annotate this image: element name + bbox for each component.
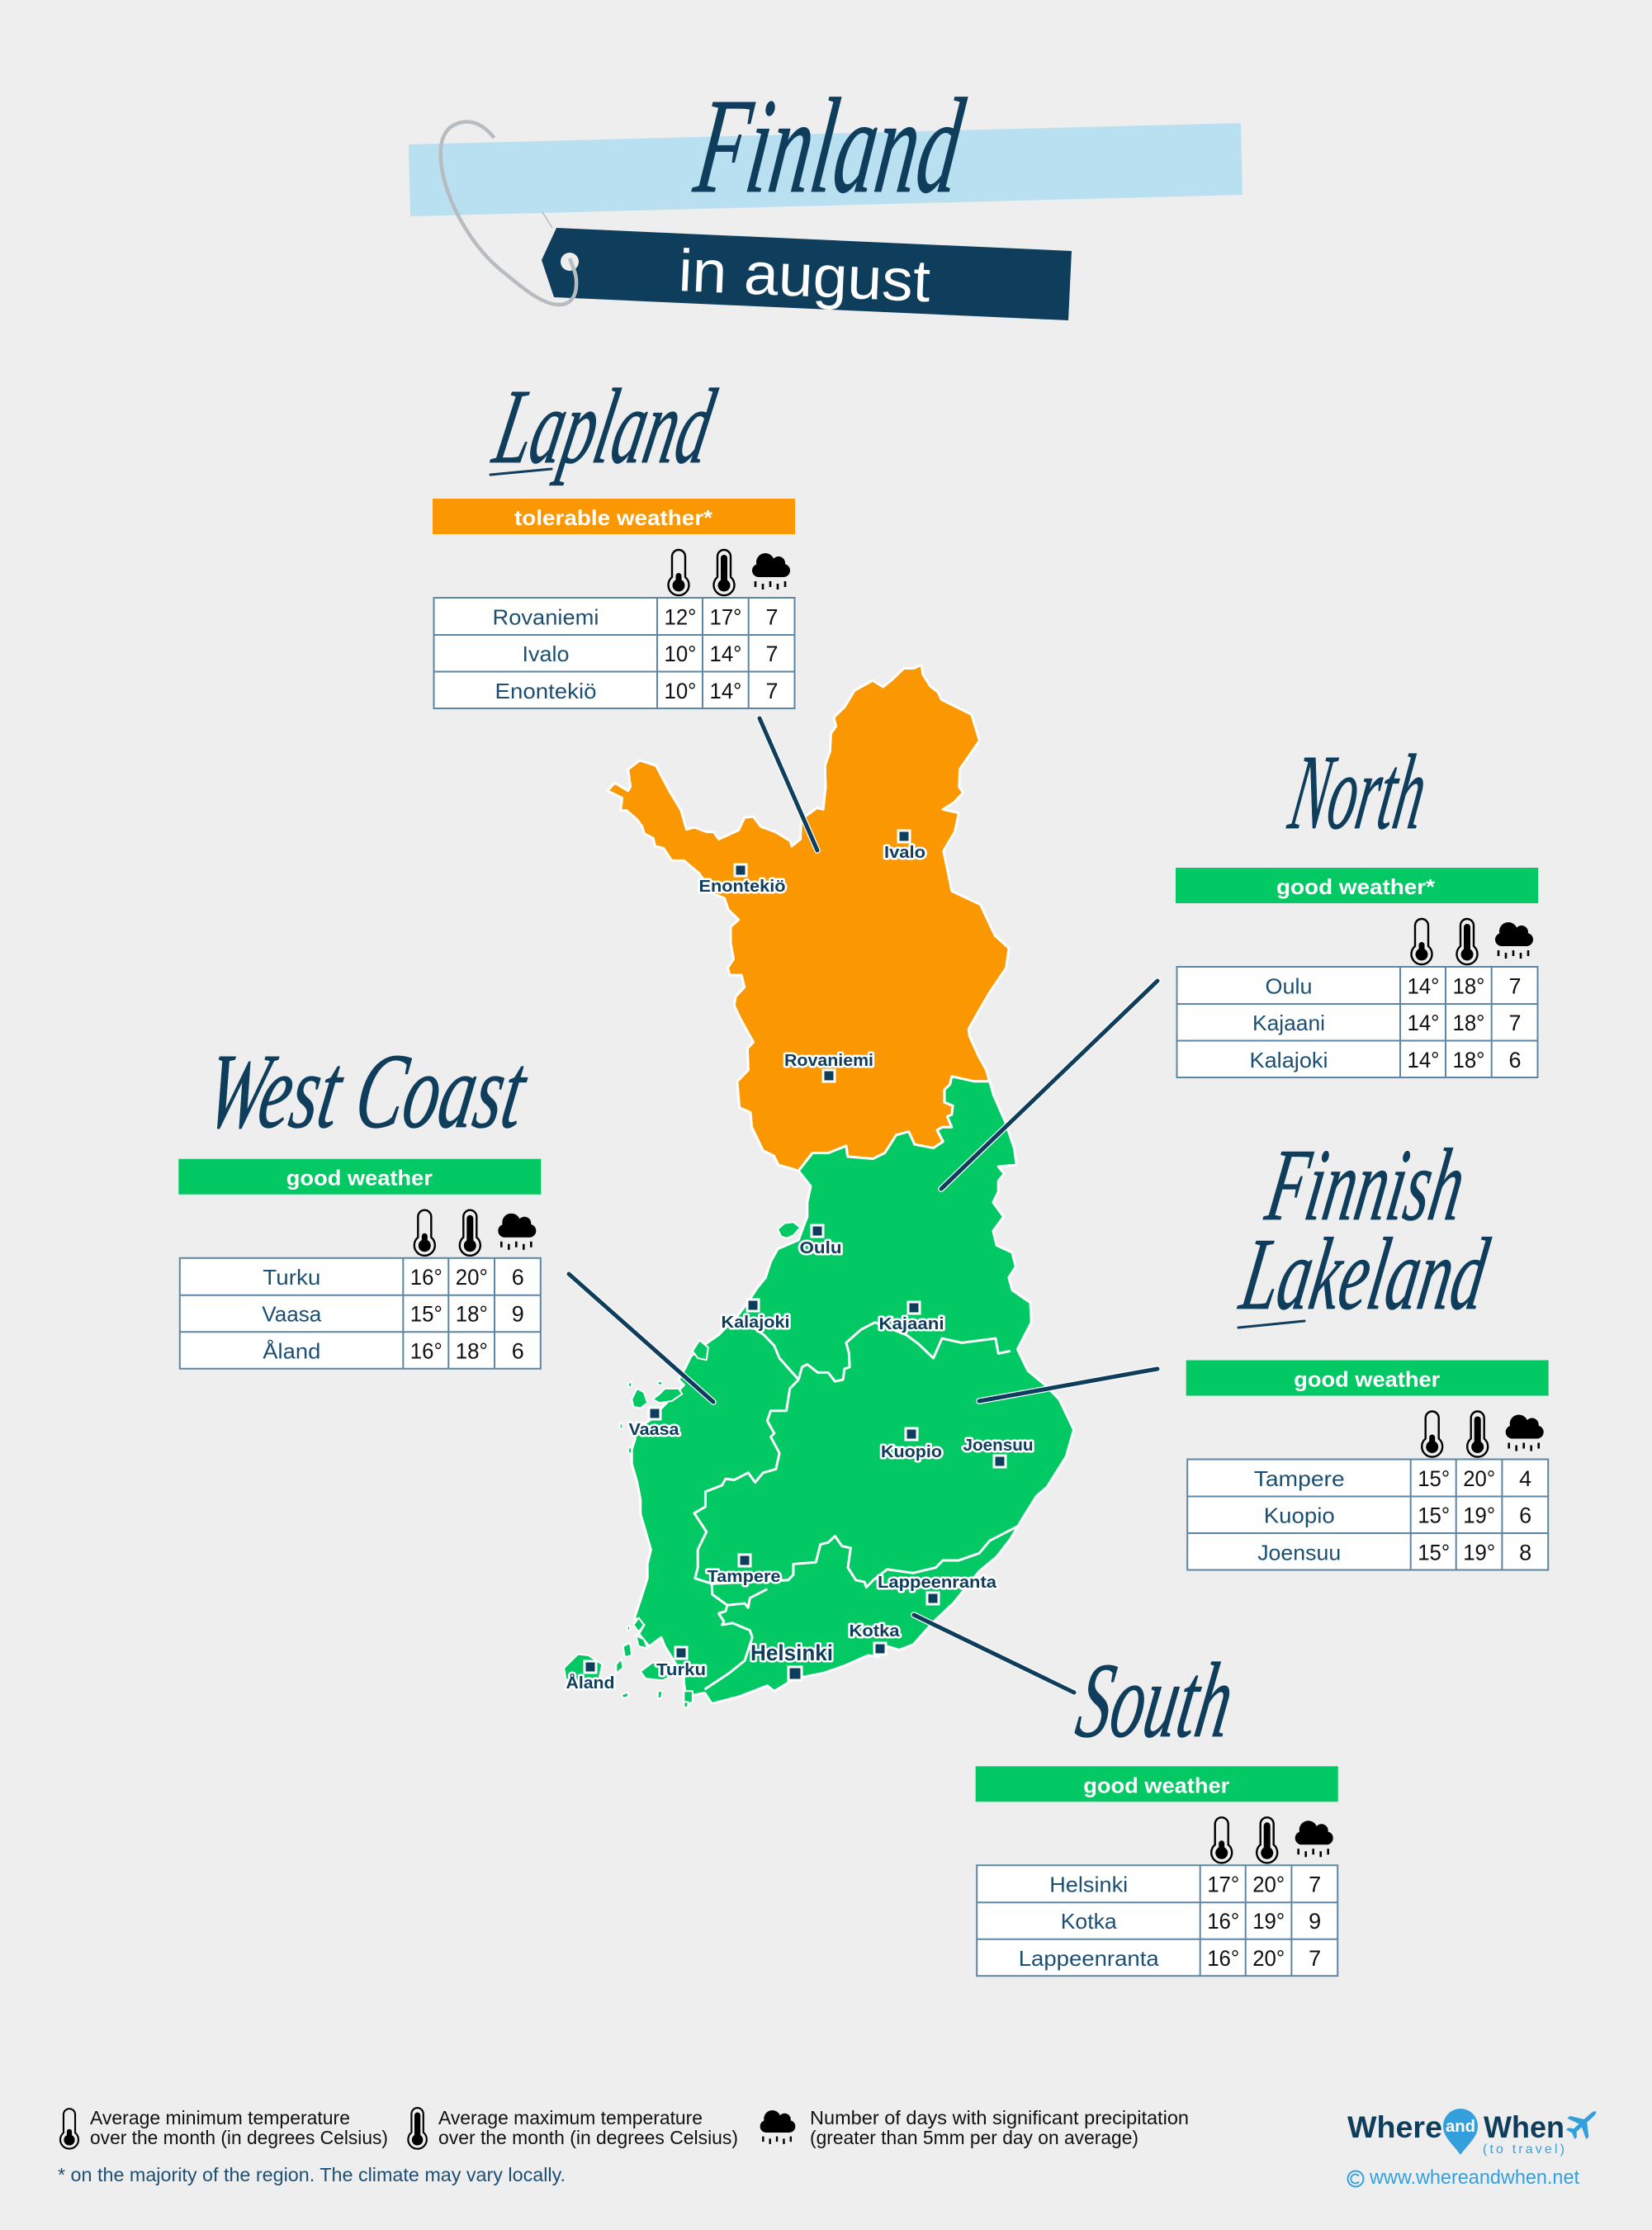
climate table: 9 xyxy=(512,1302,524,1327)
city: Kajaani: Kajaani xyxy=(878,1315,944,1333)
climate table: 6 xyxy=(512,1339,524,1364)
climate table: 9 xyxy=(1309,1909,1321,1934)
climate table: 7 xyxy=(765,642,779,666)
city: Joensuu: Joensuu xyxy=(963,1437,1034,1455)
city: Kalajoki xyxy=(722,1300,789,1332)
climate table: 20° xyxy=(456,1265,488,1290)
islands xyxy=(564,1222,800,1707)
city: Oulu xyxy=(799,1225,842,1257)
region: Lapland xyxy=(608,665,1009,1171)
climate table: 15° xyxy=(1418,1503,1450,1527)
wordmark: Where: Where xyxy=(1347,2110,1442,2144)
city: Rovaniemi: Rovaniemi xyxy=(784,1052,873,1070)
climate table: 10° xyxy=(664,642,697,666)
city: Tampere xyxy=(707,1555,781,1586)
icon: map pin: and xyxy=(1446,2118,1475,2136)
climate table: 12° xyxy=(664,604,697,629)
climate table: 15° xyxy=(1418,1466,1450,1491)
climate table: 18° xyxy=(456,1302,488,1327)
city: Åland xyxy=(566,1661,614,1693)
climate table: Åland xyxy=(263,1339,320,1364)
climate table xyxy=(977,1865,1337,1976)
legend item: precipitation days: (greater than 5mm per day on average) xyxy=(810,2127,1138,2148)
weather rating bar: good weather* xyxy=(1276,874,1436,899)
city: Enontekiö xyxy=(698,864,786,896)
weather rating bar xyxy=(178,1159,541,1195)
panel: North xyxy=(1176,733,1538,1077)
icon: plane xyxy=(1561,2101,1606,2145)
city: Ivalo: Ivalo xyxy=(884,844,925,862)
climate table: Rovaniemi xyxy=(492,604,599,629)
climate table: 20° xyxy=(1463,1466,1495,1491)
city: Lappeenranta xyxy=(878,1574,997,1604)
climate table: 17° xyxy=(710,604,741,629)
climate table: 7 xyxy=(765,604,779,629)
climate table: Enontekiö xyxy=(495,679,596,703)
weather rating bar xyxy=(1176,868,1538,903)
copyright and website: www.whereandwhen.net xyxy=(1369,2166,1579,2189)
climate table: Kotka xyxy=(1061,1909,1117,1934)
heading: Finland: Finland xyxy=(687,70,972,221)
panel: Lapland xyxy=(433,367,795,708)
climate table xyxy=(434,598,794,708)
climate table xyxy=(1177,967,1537,1077)
weather rating bar: tolerable weather* xyxy=(514,505,713,530)
climate table: 8 xyxy=(1519,1541,1531,1565)
panel: South xyxy=(976,1641,1338,1976)
legend item: maximum temperature xyxy=(408,2107,738,2149)
city: Enontekiö: Enontekiö xyxy=(698,878,786,896)
heading: North: North xyxy=(1281,733,1435,852)
luggage tag xyxy=(542,228,1072,320)
legend item: minimum temperature: over the month (in degrees Celsius) xyxy=(90,2127,388,2148)
city: Turku: Turku xyxy=(656,1661,706,1679)
city: Kajaani xyxy=(878,1302,944,1333)
climate table: 18° xyxy=(1453,1011,1484,1035)
city: Ivalo xyxy=(884,831,925,862)
climate table: 7 xyxy=(765,679,779,703)
climate table: 16° xyxy=(1207,1946,1239,1971)
weather rating bar: good weather xyxy=(1294,1367,1440,1392)
climate table: 19° xyxy=(1463,1503,1495,1527)
city: Kalajoki: Kalajoki xyxy=(722,1314,789,1332)
logo: Where and When xyxy=(1347,2101,1606,2189)
climate table: 4 xyxy=(1519,1466,1531,1491)
climate table: 7 xyxy=(1309,1946,1321,1971)
weather rating bar: good weather xyxy=(1083,1773,1229,1797)
climate table: 19° xyxy=(1463,1541,1495,1565)
region borders xyxy=(694,1323,1017,1689)
weather icons xyxy=(669,550,790,595)
climate table: 10° xyxy=(664,679,697,703)
legend item: precipitation days: Number of days with significant precipitation xyxy=(810,2107,1189,2128)
weather icons xyxy=(414,1210,536,1256)
climate table: 16° xyxy=(410,1339,443,1364)
climate table: 7 xyxy=(1508,1011,1522,1035)
city: Kotka: Kotka xyxy=(849,1622,900,1641)
climate table: 14° xyxy=(710,679,741,703)
city: Kotka xyxy=(849,1622,900,1655)
climate table: 18° xyxy=(1453,974,1484,999)
climate table xyxy=(180,1258,541,1369)
city: Vaasa: Vaasa xyxy=(629,1421,679,1439)
legend item: precipitation days xyxy=(760,2107,1189,2148)
tagline: (to travel) xyxy=(1483,2142,1564,2157)
region: North, West Coast, Lakeland and South xyxy=(564,1077,1074,1707)
climate table: 6 xyxy=(1508,1048,1522,1072)
heading: Lapland: Lapland xyxy=(485,367,724,486)
climate table xyxy=(1187,1460,1548,1570)
leader line: North xyxy=(941,981,1157,1189)
legend item: minimum temperature: Average minimum temperature xyxy=(90,2107,350,2128)
climate table: Oulu xyxy=(1265,974,1313,999)
city: Rovaniemi xyxy=(784,1052,873,1082)
city: Åland: Åland xyxy=(566,1673,614,1693)
heading: Finnish Lakeland: Finnish xyxy=(1258,1129,1473,1243)
heading: Lapland xyxy=(485,367,724,486)
climate table: Joensuu xyxy=(1257,1541,1341,1565)
city: Kuopio: Kuopio xyxy=(881,1443,942,1461)
climate table: 16° xyxy=(410,1265,443,1290)
climate table: 16° xyxy=(1207,1909,1239,1934)
leader line: Lapland xyxy=(760,718,817,850)
leader line: Finnish Lakeland xyxy=(979,1369,1157,1401)
icon: map pin xyxy=(1443,2109,1478,2155)
climate table: 7 xyxy=(1309,1872,1321,1896)
climate table: 18° xyxy=(456,1339,488,1364)
wordmark: When: When xyxy=(1484,2110,1564,2144)
weather icons xyxy=(1412,919,1533,964)
city: Kuopio xyxy=(881,1428,942,1461)
climate table: Vaasa xyxy=(262,1302,322,1327)
heading: West Coast: West Coast xyxy=(198,1032,537,1151)
legend xyxy=(58,2107,1189,2185)
city: Joensuu xyxy=(963,1437,1034,1467)
climate table: 14° xyxy=(1407,1011,1440,1035)
city: Turku xyxy=(656,1647,706,1679)
city: Tampere: Tampere xyxy=(707,1568,781,1586)
city: Helsinki: Helsinki xyxy=(750,1641,833,1665)
climate table: Kuopio xyxy=(1264,1503,1335,1527)
climate table: 7 xyxy=(1508,974,1522,999)
climate table: Helsinki xyxy=(1049,1872,1128,1896)
climate table: 20° xyxy=(1252,1946,1285,1971)
climate table: Lappeenranta xyxy=(1019,1946,1159,1971)
city: Vaasa xyxy=(629,1408,679,1439)
climate table: 18° xyxy=(1453,1048,1484,1072)
climate table: 15° xyxy=(410,1302,443,1327)
legend item: minimum temperature xyxy=(60,2107,388,2149)
climate table: 6 xyxy=(512,1265,524,1290)
climate table: 17° xyxy=(1207,1872,1239,1896)
climate table: 14° xyxy=(710,642,741,666)
footnote: * on the majority of the region. The climate may vary locally. xyxy=(58,2164,566,2185)
climate table: 19° xyxy=(1252,1909,1285,1934)
panel: West Coast xyxy=(178,1032,541,1369)
heading: South: South xyxy=(1069,1641,1242,1760)
weather rating bar xyxy=(433,499,795,534)
title: Finland in august xyxy=(409,70,1243,320)
climate table: 6 xyxy=(1519,1503,1531,1527)
heading: Finnish Lakeland xyxy=(1233,1129,1496,1332)
weather rating bar xyxy=(976,1766,1338,1802)
city: Oulu: Oulu xyxy=(799,1239,842,1257)
heading: Finnish Lakeland: Lakeland xyxy=(1233,1218,1496,1332)
title band xyxy=(409,123,1243,216)
climate table: 14° xyxy=(1407,974,1440,999)
climate table: Kalajoki xyxy=(1250,1048,1328,1072)
map of Finland xyxy=(564,665,1074,1707)
weather rating bar: good weather xyxy=(286,1166,433,1191)
panel: Finnish Lakeland xyxy=(1186,1129,1549,1570)
leader line: South xyxy=(914,1615,1074,1693)
city: Helsinki xyxy=(750,1641,833,1680)
weather icons xyxy=(1422,1412,1544,1457)
climate table: Turku xyxy=(263,1265,320,1290)
tag string xyxy=(441,122,576,305)
subtitle: in august: in august xyxy=(677,238,932,315)
climate table: Tampere xyxy=(1254,1466,1345,1491)
climate table: 14° xyxy=(1407,1048,1440,1072)
weather icons xyxy=(1211,1817,1333,1863)
climate table: Ivalo xyxy=(522,642,570,666)
leader line: West Coast xyxy=(569,1274,713,1402)
climate table: 15° xyxy=(1418,1541,1450,1565)
legend item: maximum temperature: over the month (in degrees Celsius) xyxy=(438,2127,738,2148)
tag hole xyxy=(561,253,579,271)
city: Lappeenranta: Lappeenranta xyxy=(878,1574,997,1592)
climate table: 20° xyxy=(1252,1872,1285,1896)
climate table: Kajaani xyxy=(1252,1011,1325,1035)
weather rating bar xyxy=(1186,1361,1549,1395)
legend item: maximum temperature: Average maximum temperature xyxy=(438,2107,703,2128)
